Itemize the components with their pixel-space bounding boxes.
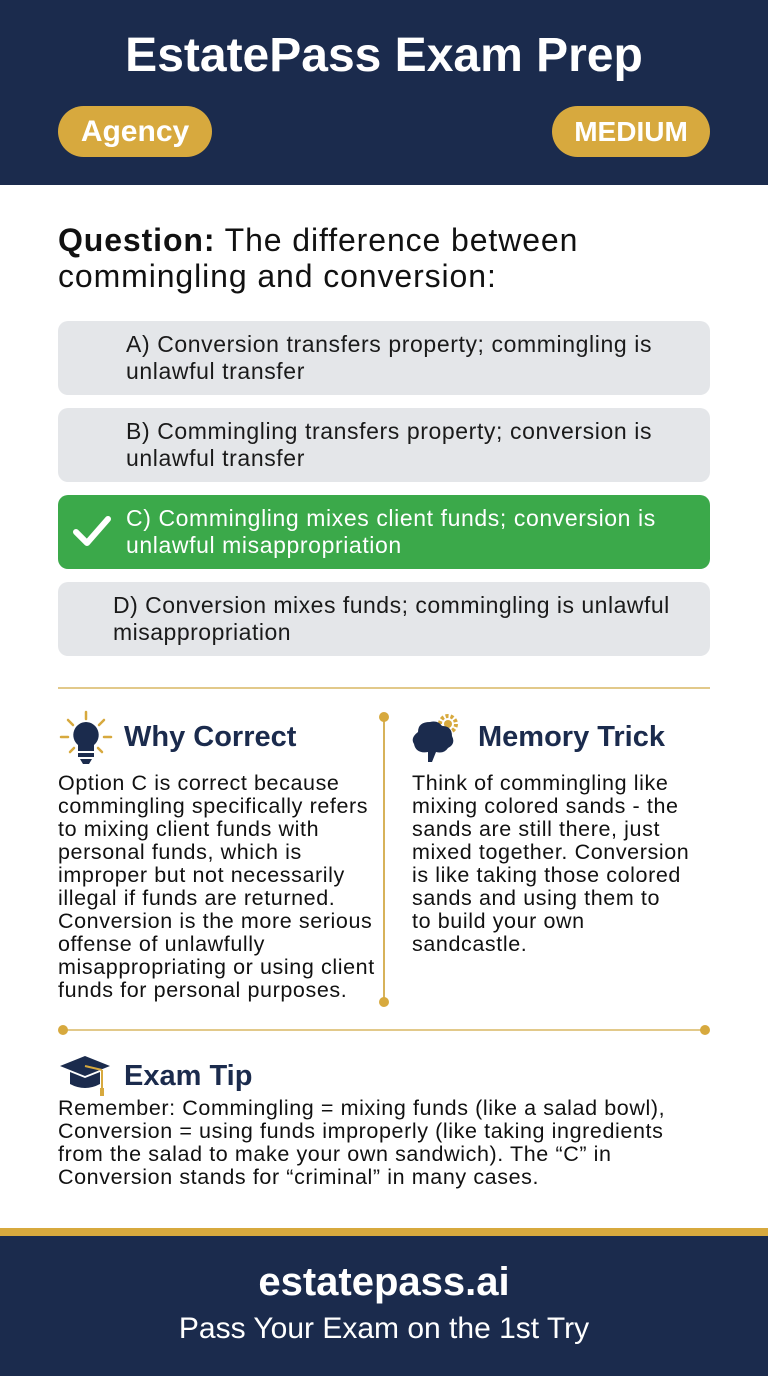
text: sandcastle. — [412, 932, 527, 956]
option B: B) Commingling transfers property; conversion is — [126, 418, 652, 444]
text: is like taking those colored — [412, 863, 681, 887]
footer — [0, 1236, 768, 1376]
text: to build your own — [412, 909, 585, 933]
text: sands are still there, just — [412, 817, 660, 841]
icon: graduation cap — [60, 1056, 110, 1096]
badge: Agency — [58, 106, 212, 157]
badge: Agency: Agency — [81, 115, 189, 148]
text: Option C is correct because — [58, 771, 340, 795]
text — [58, 1096, 665, 1189]
question — [58, 222, 578, 294]
option C correct — [58, 495, 710, 569]
footer url: estatepass.ai — [258, 1260, 510, 1304]
icon: brain gear — [412, 714, 458, 762]
option D — [58, 582, 710, 656]
option D: D) Conversion mixes funds; commingling is unlawful — [113, 592, 670, 618]
question: Question: The difference between — [58, 222, 578, 258]
heading: Exam Tip — [124, 1060, 252, 1092]
panel: exam tip — [58, 1056, 665, 1189]
icon: check — [73, 516, 111, 546]
text: from the salad to make your own sandwich). The “C” in — [58, 1142, 612, 1166]
text: commingling specifically refers — [58, 794, 368, 818]
option C correct: C) Commingling mixes client funds; conversion is — [126, 505, 656, 531]
option A: A) Conversion transfers property; commingling is — [126, 331, 652, 357]
option C correct: unlawful misappropriation — [126, 532, 402, 558]
option A — [58, 321, 710, 395]
text: Conversion = using funds improperly (like taking ingredients — [58, 1119, 663, 1143]
text: mixing colored sands - the — [412, 794, 679, 818]
text — [412, 771, 689, 956]
text: funds for personal purposes. — [58, 978, 347, 1002]
text: Conversion stands for “criminal” in many cases. — [58, 1165, 539, 1189]
tagline: Pass Your Exam on the 1st Try — [179, 1312, 589, 1345]
text: improper but not necessarily — [58, 863, 345, 887]
text: misappropriating or using client — [58, 955, 375, 979]
text: Think of commingling like — [412, 771, 668, 795]
text: Remember: Commingling = mixing funds (like a salad bowl), — [58, 1096, 665, 1120]
header — [0, 0, 768, 185]
question: commingling and conversion: — [58, 258, 497, 294]
icon: lightbulb — [60, 710, 112, 764]
option B — [58, 408, 710, 482]
panel: memory trick — [412, 714, 689, 956]
heading: Why Correct — [124, 721, 296, 753]
badge: MEDIUM: MEDIUM — [574, 116, 688, 147]
text: sands and using them to — [412, 886, 660, 910]
badge: MEDIUM — [552, 106, 710, 157]
option D: misappropriation — [113, 619, 291, 645]
title: EstatePass Exam Prep — [125, 29, 643, 82]
text: illegal if funds are returned. — [58, 886, 335, 910]
text: personal funds, which is — [58, 840, 302, 864]
text: offense of unlawfully — [58, 932, 265, 956]
option A: unlawful transfer — [126, 358, 305, 384]
option B: unlawful transfer — [126, 445, 305, 471]
text: Conversion is the more serious — [58, 909, 372, 933]
heading: Memory Trick — [478, 721, 665, 753]
text: to mixing client funds with — [58, 817, 319, 841]
panel: why correct — [58, 710, 375, 1002]
text — [58, 771, 375, 1002]
text: mixed together. Conversion — [412, 840, 689, 864]
